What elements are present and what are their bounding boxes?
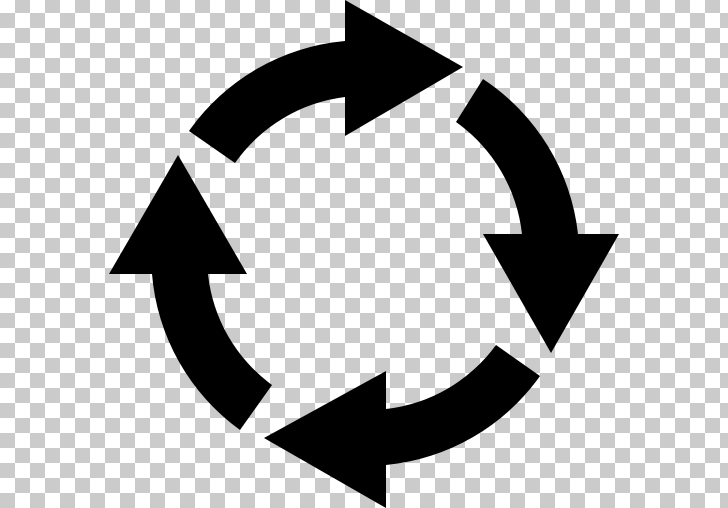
arrow: left, pointing up bbox=[109, 155, 272, 430]
arrow: right, pointing down bbox=[456, 79, 619, 353]
arrow: top, pointing right bbox=[189, 0, 463, 163]
arrow: bottom, pointing left bbox=[264, 345, 540, 508]
